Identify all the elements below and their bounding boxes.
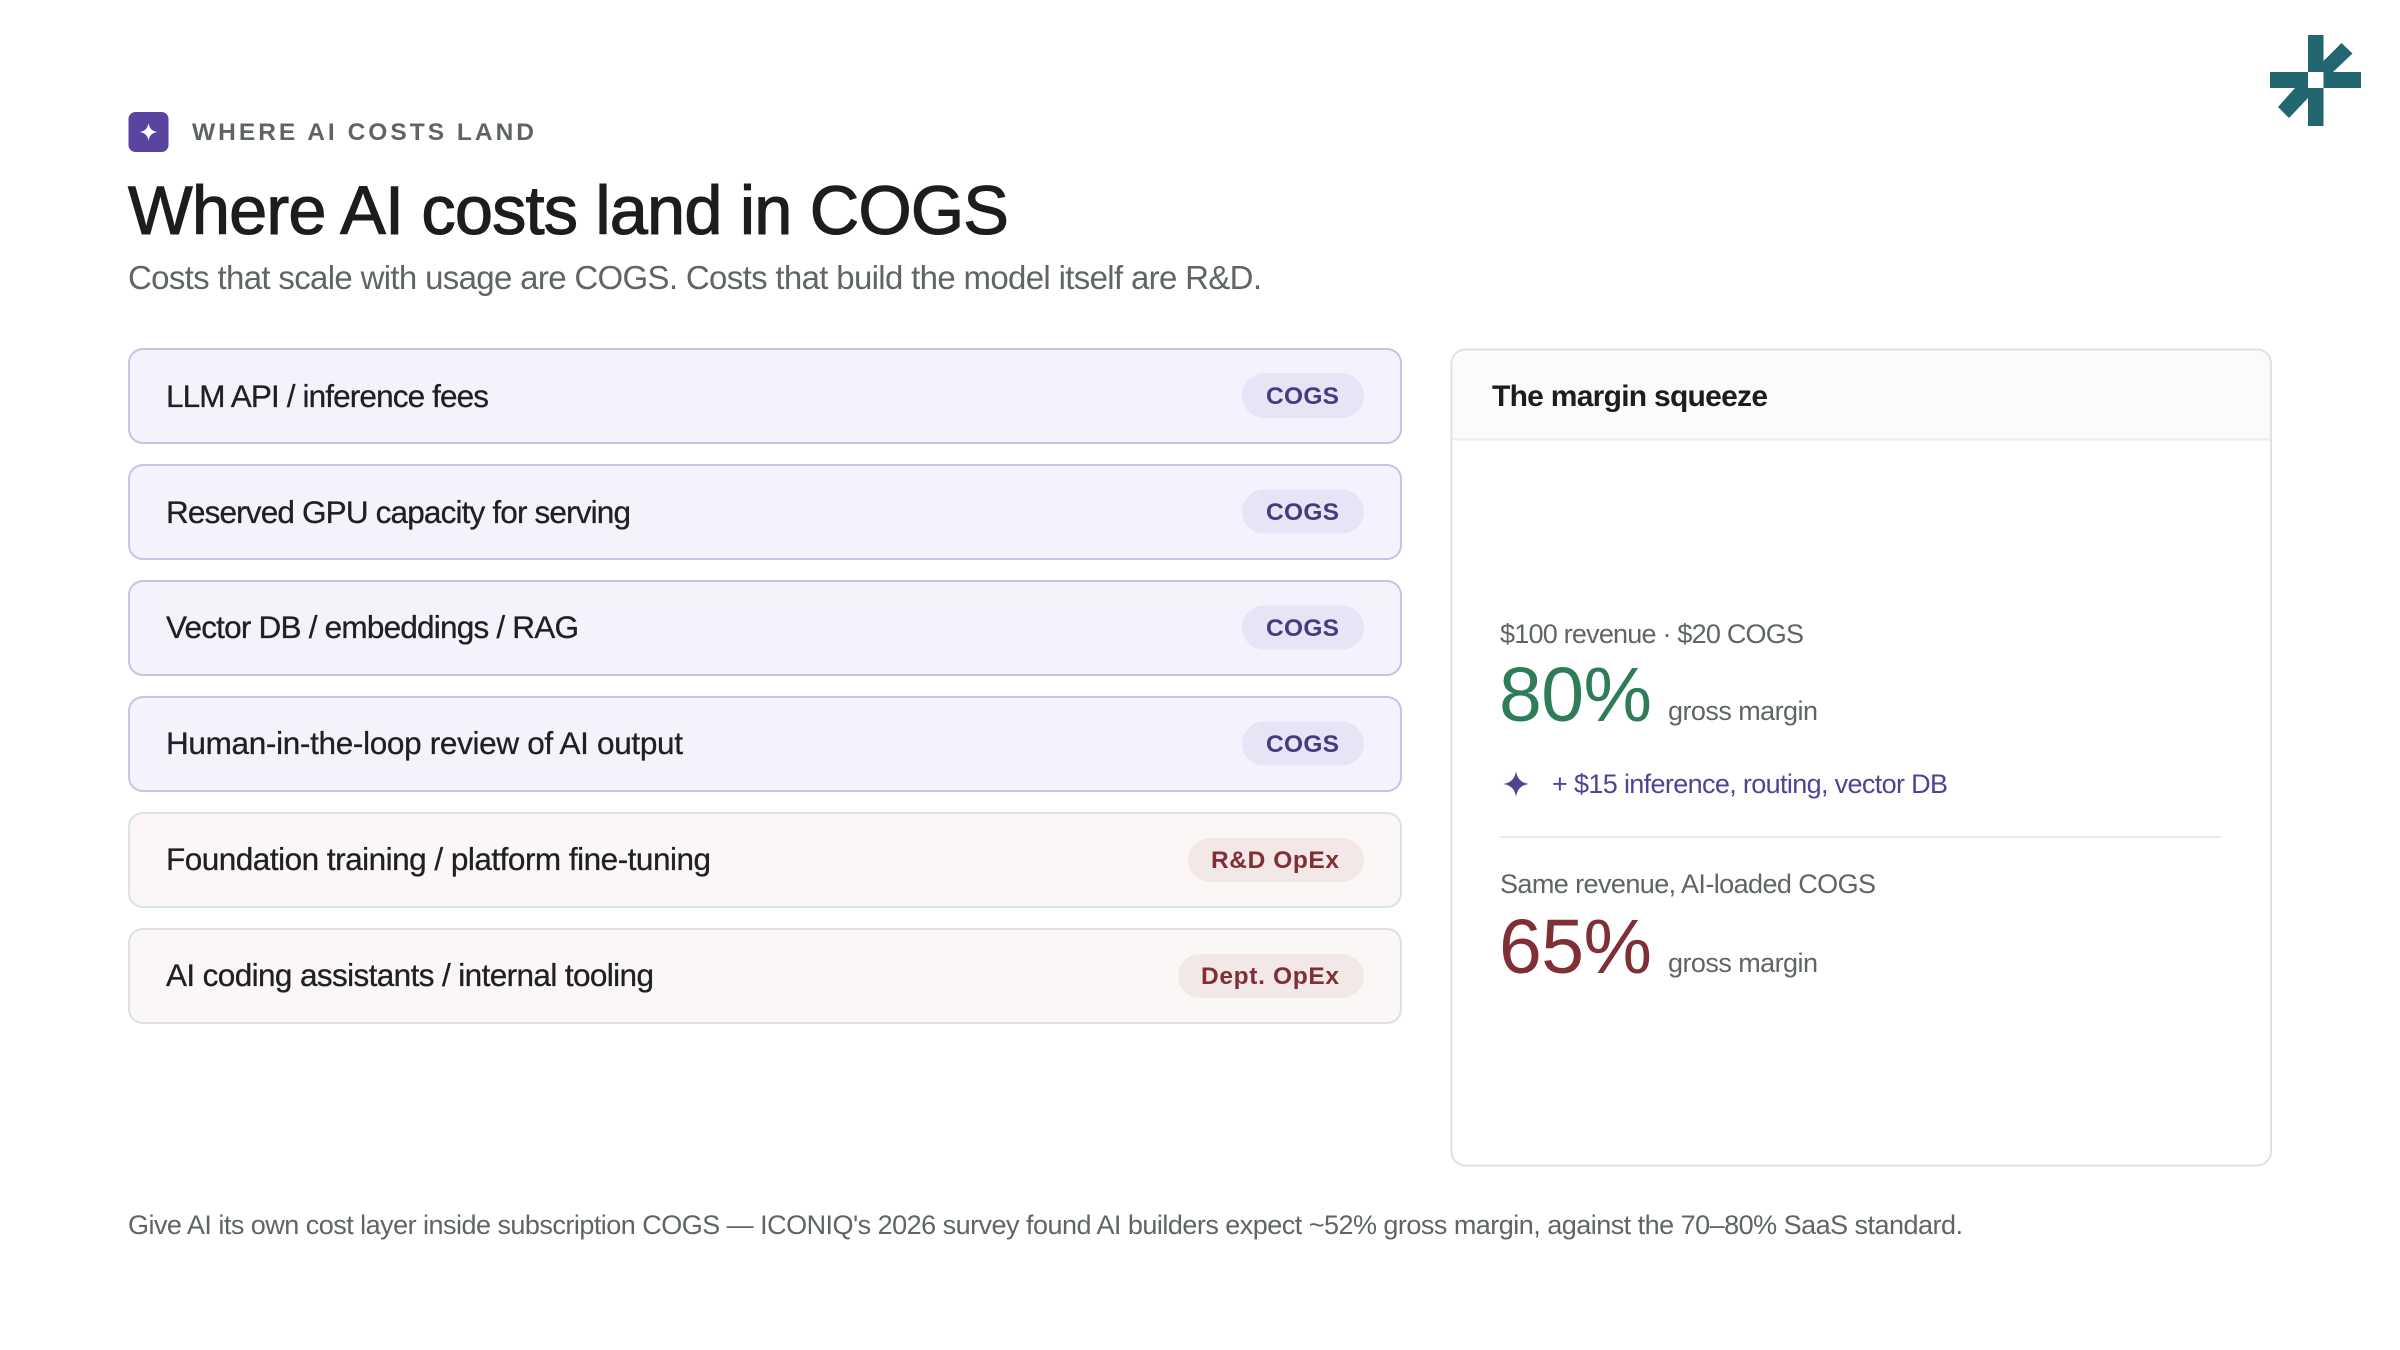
scenario: before AI: $100 revenue · $20 COGS xyxy=(1500,619,1804,649)
row: Vector DB: COGS xyxy=(1266,615,1339,642)
eyebrow icon: sparkle badge xyxy=(128,112,168,152)
row: LLM API: COGS xyxy=(1266,383,1339,410)
row: Human-in-the-loop xyxy=(129,697,1401,791)
subtitle: Costs that scale with usage are COGS. Costs that build the model itself are R&D. xyxy=(128,259,1262,296)
title: Where AI costs land in COGS xyxy=(128,172,1009,249)
scenario: before AI: 80% xyxy=(1499,652,1652,738)
row: Vector DB xyxy=(129,581,1401,675)
row: Human-in-the-loop: Human-in-the-loop review of AI output xyxy=(166,725,683,761)
scenario: before AI: gross margin xyxy=(1668,696,1818,726)
row: Foundation training: R&D OpEx xyxy=(1211,847,1339,874)
row: Foundation training xyxy=(129,813,1401,907)
panel: cost rows xyxy=(129,349,1401,1023)
scenario: AI loaded xyxy=(1499,869,1876,990)
scenario: AI loaded: 65% xyxy=(1499,904,1652,990)
row: Reserved GPU: Reserved GPU capacity for serving xyxy=(166,494,631,530)
row: Reserved GPU: COGS xyxy=(1266,499,1339,526)
scenario: AI loaded: gross margin xyxy=(1668,948,1818,978)
row: AI coding assistants xyxy=(129,929,1401,1023)
row: LLM API xyxy=(129,349,1401,443)
row: AI coding assistants: Dept. OpEx xyxy=(1201,963,1339,990)
scenario: AI loaded: Same revenue, AI-loaded COGS xyxy=(1500,869,1876,899)
eyebrow: WHERE AI COSTS LAND xyxy=(192,119,534,146)
row: LLM API: LLM API / inference fees xyxy=(166,378,489,414)
panel: the margin squeeze xyxy=(1452,350,2271,1166)
row: Foundation training: Foundation training / platform fine-tuning xyxy=(166,841,711,877)
row: Vector DB: Vector DB / embeddings / RAG xyxy=(166,609,579,645)
row: Reserved GPU xyxy=(129,465,1401,559)
panel heading: The margin squeeze xyxy=(1492,380,1768,413)
row: AI coding assistants: AI coding assistants / internal tooling xyxy=(166,957,654,993)
logo xyxy=(2270,35,2361,126)
row: Human-in-the-loop: COGS xyxy=(1266,731,1339,758)
scenario: before AI xyxy=(1499,619,1818,738)
footer note: Give AI its own cost layer inside subscription COGS — ICONIQ's 2026 survey found AI builders expect ~52% gross margin, against the 70–80% SaaS standard. xyxy=(128,1210,1963,1240)
added cost callout: + $15 inference, routing, vector DB xyxy=(1552,769,1948,799)
